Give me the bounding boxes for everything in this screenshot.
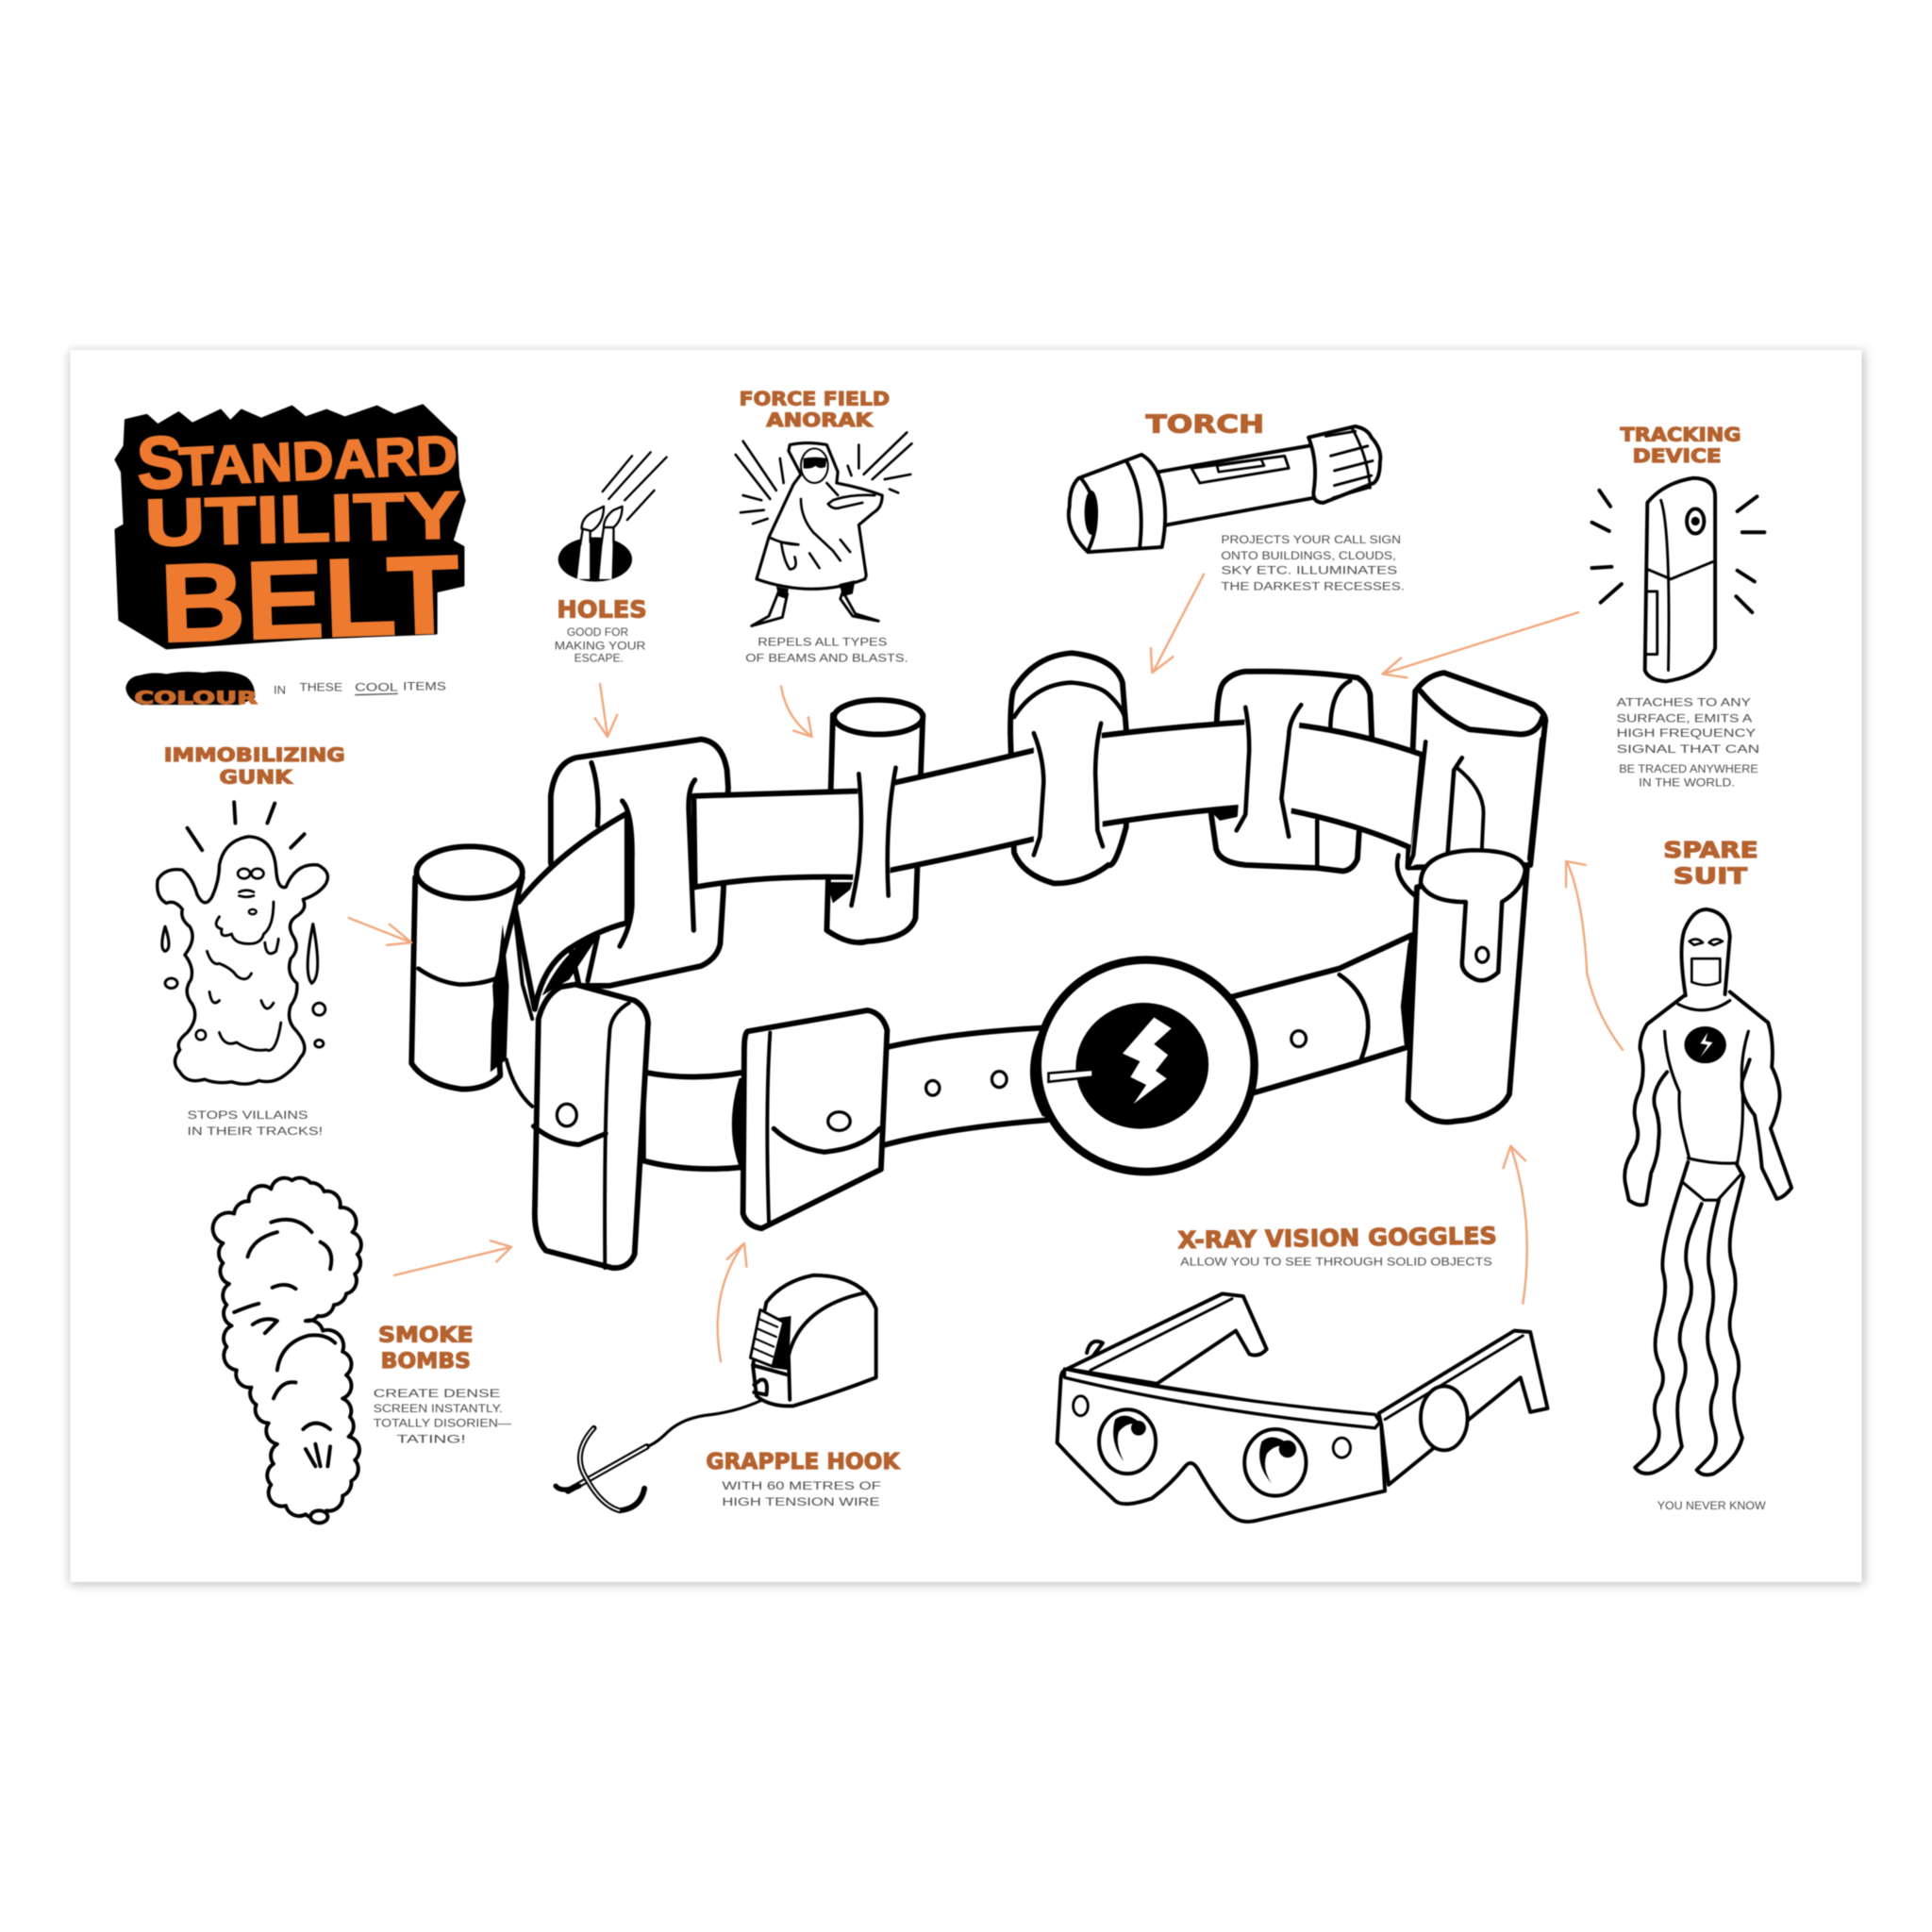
torch panel: [1069, 410, 1405, 593]
icon: goggles: [1058, 1293, 1547, 1522]
belt buckle with lightning bolt: [1030, 959, 1255, 1172]
text: holes description: MAKING YOUR: [555, 639, 645, 652]
belt back band: [693, 722, 1423, 887]
arrow: holes: [595, 684, 617, 737]
text: smoke description: CREATE DENSE: [374, 1387, 500, 1400]
back shadow pieces under band: [1211, 806, 1242, 821]
icon: tracking device: [1592, 478, 1764, 681]
heading: smoke bombs: BOMBS: [381, 1349, 471, 1374]
text: anorak description: REPELS ALL TYPES: [758, 635, 887, 648]
text: grapple description: WITH 60 METRES OF: [722, 1479, 881, 1492]
subtitle: colour in these cool items: COLOUR: [134, 689, 258, 708]
heading: force field anorak: [740, 389, 890, 431]
text: torch description: SKY ETC. ILLUMINATES: [1221, 564, 1397, 577]
text: torch description: ONTO BUILDINGS, CLOUDS,: [1221, 549, 1396, 562]
belt left curved band: [514, 813, 627, 1009]
text: torch description: PROJECTS YOUR CALL SIGN: [1221, 533, 1401, 546]
force field anorak panel: [736, 389, 912, 664]
heading: grapple hook: GRAPPLE HOOK: [706, 1448, 900, 1474]
text: tracking description: SURFACE, EMITS A: [1617, 711, 1753, 724]
subtitle: colour in these cool items: ITEMS: [403, 679, 446, 692]
heading: force field anorak: FORCE FIELD: [740, 389, 890, 410]
title block: BELT: [158, 532, 461, 665]
immobilizing gunk panel: [158, 744, 345, 1138]
pouch: far back right tall case: [1408, 673, 1545, 868]
text: grapple description: [722, 1479, 881, 1508]
pouch: back centre arch case: [1010, 653, 1126, 883]
text: tracking description: SIGNAL THAT CAN: [1617, 742, 1759, 756]
text: torch description: THE DARKEST RECESSES.: [1221, 580, 1405, 593]
subtitle: colour in these cool items: COOL: [355, 681, 398, 694]
heading: smoke bombs: SMOKE: [378, 1323, 474, 1347]
arrow: tracking device: [1382, 612, 1578, 677]
arrow: spare suit: [1566, 861, 1623, 1050]
text: smoke description: SCREEN INSTANTLY.: [374, 1402, 503, 1415]
title block: [116, 406, 464, 665]
text: holes description: [555, 625, 645, 664]
text: tracking description: BE TRACED ANYWHERE: [1619, 762, 1758, 775]
pouch: far left cylinder: [411, 846, 523, 1090]
text: anorak description: OF BEAMS AND BLASTS.: [745, 651, 908, 664]
belt front band left: [643, 1072, 745, 1169]
utility belt main drawing: [411, 653, 1545, 1268]
pouch: front left tall with flap: [534, 985, 648, 1268]
icon: gunk ghost: [158, 802, 327, 1084]
text: holes description: GOOD FOR: [567, 625, 628, 639]
text: grapple description: HIGH TENSION WIRE: [722, 1495, 880, 1508]
subtitle: colour in these cool items: IN: [274, 683, 286, 696]
pouch: back cylinder: [826, 700, 923, 942]
icon: hole with legs: [558, 452, 667, 581]
x-ray vision goggles panel: [1058, 1222, 1547, 1522]
holes panel: [555, 452, 667, 664]
title block: S: [135, 420, 186, 506]
text: torch description: [1221, 533, 1405, 593]
heading: immobilizing gunk: IMMOBILIZING: [164, 744, 345, 766]
heading: torch: TORCH: [1146, 410, 1264, 439]
belt front band centre and right: [881, 935, 1421, 1146]
heading: holes: HOLES: [557, 595, 647, 623]
tracking device panel: [1592, 425, 1764, 789]
pouch: back right rounded case: [1211, 672, 1372, 871]
paper sheet: [70, 350, 1864, 1585]
icon: anorak figure: [736, 432, 912, 626]
heading: spare suit: [1663, 837, 1758, 889]
text: holes description: ESCAPE.: [575, 651, 624, 664]
arrow: gunk: [349, 918, 411, 945]
heading: force field anorak: ANORAK: [766, 409, 874, 431]
heading: x-ray vision goggles: X-RAY VISION GOGGLES: [1177, 1222, 1497, 1254]
arrow: smoke bombs: [394, 1241, 511, 1275]
title block: TANDARD: [177, 425, 458, 498]
heading: immobilizing gunk: [164, 744, 345, 789]
smoke bombs panel: [213, 1178, 512, 1523]
text: tracking description: HIGH FREQUENCY: [1617, 726, 1756, 740]
title block: UTILITY: [143, 477, 461, 560]
arrow: anorak: [781, 687, 812, 737]
text: anorak description: [745, 635, 908, 664]
arrow: torch: [1151, 575, 1204, 673]
heading: tracking device: DEVICE: [1633, 445, 1722, 467]
back curve behind left cylinder: [507, 906, 532, 1107]
icon: torch: [1069, 426, 1380, 552]
spare suit panel: [1624, 837, 1791, 1512]
text: gunk description: IN THEIR TRACKS!: [188, 1124, 323, 1138]
belt loops on back pouches: [620, 705, 1484, 946]
text: tracking description: [1617, 695, 1759, 789]
arrow: goggles: [1503, 1146, 1527, 1304]
text: smoke description: TATING!: [397, 1432, 466, 1445]
subtitle: colour in these cool items: [125, 672, 446, 708]
heading: tracking device: [1621, 425, 1741, 467]
text: goggles description: ALLOW YOU TO SEE THROUGH SOLID OBJECTS: [1180, 1255, 1492, 1268]
icon: smoke cloud: [213, 1178, 361, 1523]
pouch: back left large case: [551, 740, 728, 986]
text: you never know: YOU NEVER KNOW: [1657, 1499, 1766, 1512]
heading: spare suit: SPARE: [1663, 837, 1758, 863]
pouch: front right cylinder: [1408, 850, 1527, 1122]
text: smoke description: [374, 1387, 512, 1445]
heading: immobilizing gunk: GUNK: [219, 767, 293, 789]
lower curl of back right strap: [1397, 855, 1415, 896]
arrow: grapple hook: [718, 1243, 747, 1361]
heading: spare suit: SUIT: [1674, 862, 1747, 889]
text: tracking description: IN THE WORLD.: [1639, 775, 1735, 789]
icon: suit figure: [1624, 909, 1791, 1474]
pouch: front middle with flap: [732, 1010, 887, 1228]
icon: grapple hook launcher: [556, 1275, 876, 1510]
heading: smoke bombs: [378, 1323, 474, 1374]
text: tracking description: ATTACHES TO ANY: [1617, 695, 1751, 708]
heading: tracking device: TRACKING: [1621, 425, 1741, 446]
text: gunk description: STOPS VILLAINS: [188, 1108, 308, 1122]
subtitle: colour in these cool items: THESE: [299, 681, 342, 694]
grapple hook panel: [556, 1275, 900, 1510]
text: smoke description: TOTALLY DISORIEN—: [374, 1416, 512, 1429]
text: gunk description: [188, 1108, 323, 1138]
